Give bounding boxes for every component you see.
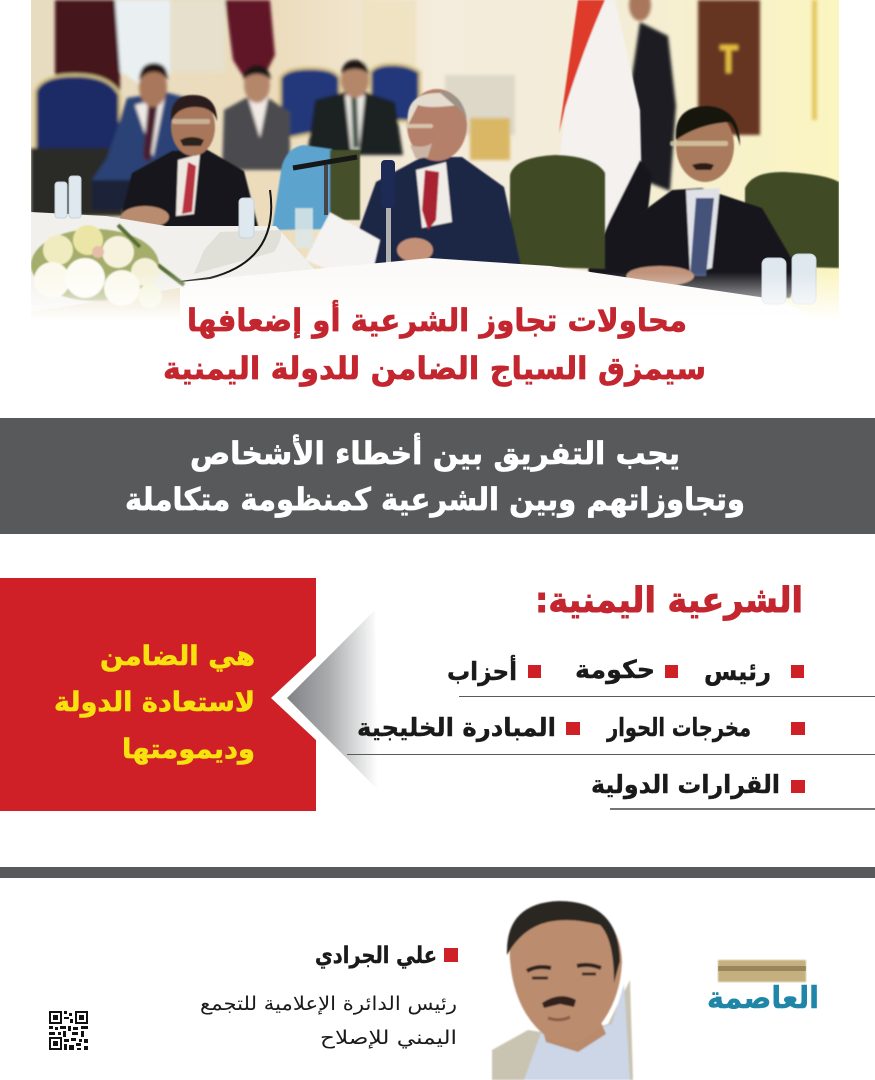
portrait: author: [492, 901, 633, 1080]
arrow: chevron pointing to red box: [271, 600, 378, 798]
author name and title: اليمني للإصلاح: [320, 1027, 457, 1049]
callout text: وديمومتها: [122, 734, 255, 765]
flowers: [31, 225, 184, 308]
list: legitimacy components: رئيس: [704, 657, 771, 686]
man: left: [118, 95, 258, 234]
bottom fade: [31, 272, 839, 320]
list: legitimacy components: حكومة: [575, 655, 655, 685]
panel: red callout box: [0, 578, 316, 811]
statement text: يجب التفريق بين أخطاء الأشخاص: [190, 433, 680, 472]
heading: red two-line headline: [163, 300, 706, 387]
callout text: لاستعادة الدولة: [54, 687, 255, 718]
author name and title: علي الجرادي: [315, 943, 437, 969]
QR code: [49, 1011, 88, 1050]
man: president: [295, 89, 522, 282]
panel: grey statement band: [0, 418, 875, 534]
callout text: هي الضامن: [100, 641, 255, 672]
footer divider band: [0, 867, 875, 878]
table back: [31, 212, 316, 312]
flag: [559, 0, 652, 295]
heading: red two-line headline: محاولات تجاوز الشرعية أو إضعافها: [187, 300, 687, 339]
author name and title: رئيس الدائرة الإعلامية للتجمع: [200, 993, 457, 1015]
bottles: [55, 176, 816, 304]
microphones: [180, 157, 418, 282]
list: legitimacy components: مخرجات الحوار: [605, 713, 751, 743]
heading: red two-line headline: سيمزق السياج الضامن للدولة اليمنية: [163, 351, 706, 387]
author name and title: [200, 943, 458, 1049]
list: legitimacy components: المبادرة الخليجية: [357, 713, 556, 742]
heading: Yemeni legitimacy: الشرعية اليمنية:: [535, 581, 803, 621]
man: right: [626, 106, 800, 298]
logo: Al-Asima: العاصمة: [707, 981, 819, 1016]
list: legitimacy components: [357, 655, 805, 800]
main table: [180, 258, 804, 314]
logo: Al-Asima: [707, 960, 819, 1016]
statement text: [125, 433, 745, 518]
statement text: وتجاوزاتهم وبين الشرعية كمنظومة متكاملة: [125, 482, 745, 518]
list: legitimacy components: القرارات الدولية: [591, 770, 780, 800]
photo: officials at conference table: [31, 0, 840, 330]
chairs: [272, 145, 839, 269]
list: legitimacy components: أحزاب: [447, 655, 517, 687]
callout text: [54, 641, 255, 765]
